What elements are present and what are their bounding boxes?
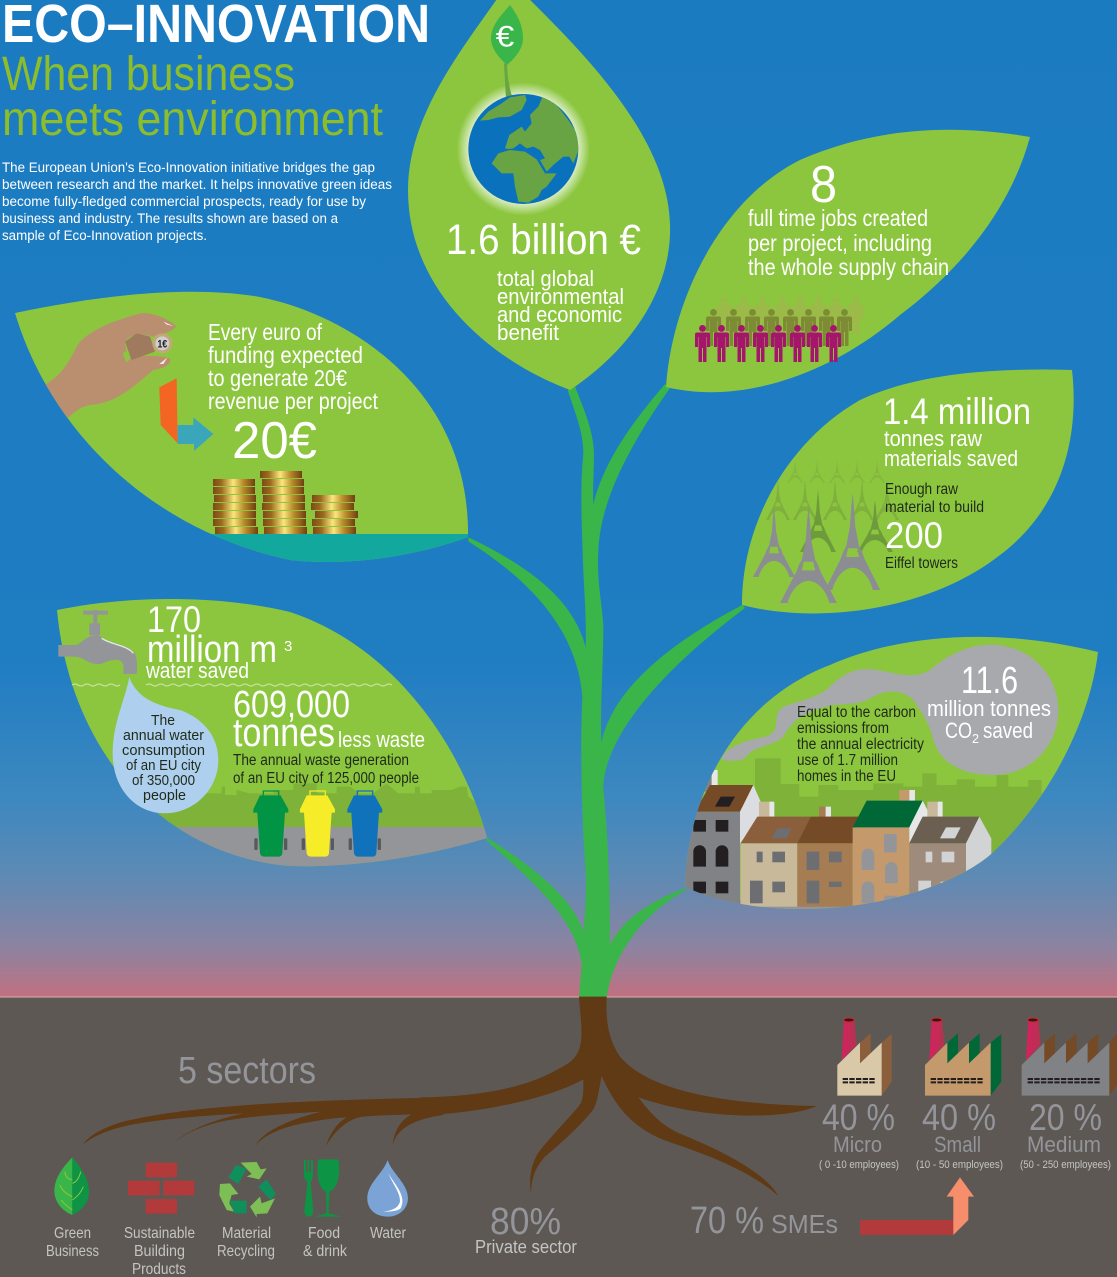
factory: medium: 20 %: [1029, 1097, 1102, 1138]
description: carbon emissions: emissions from: [797, 720, 889, 737]
panel: CO2 and houses leaf: [670, 637, 1098, 920]
wave dividers: [72, 684, 392, 686]
sector: water: [367, 1160, 408, 1242]
intro text: The European Union's Eco-Innovation initiative bridges the gap: [2, 160, 375, 175]
sector: water: Water: [370, 1225, 407, 1242]
panel: water and waste leaf: [50, 599, 500, 877]
stat: 80% private sector: 80%: [490, 1201, 561, 1243]
intro text: between research and the market. It helps innovative green ideas: [2, 177, 392, 192]
panel: top leaf, global benefit: [408, 0, 670, 390]
description: enough raw material: [885, 481, 984, 516]
factory: medium: [1020, 1018, 1117, 1171]
factory: small: [916, 1018, 1003, 1171]
description: jobs: the whole supply chain: [748, 254, 949, 280]
big number: 170 million m3: 170: [147, 599, 201, 640]
big number: 170 million m3: water saved: [145, 658, 249, 683]
big number: 11.6 million tonnes CO2: saved: [983, 718, 1033, 743]
factory: micro: Micro: [833, 1132, 882, 1157]
description: funding: Every euro of: [208, 319, 323, 345]
description: funding: [208, 319, 379, 414]
description: global benefit: environmental: [497, 284, 624, 309]
big number: 170 million m3: [145, 599, 292, 683]
intro text: business and industry. The results shown are based on a: [2, 211, 338, 226]
big number: 8: 8: [810, 156, 837, 214]
factory: micro: ( 0 -10 employees): [819, 1159, 899, 1171]
water drop callout: of an EU city: [126, 757, 201, 774]
description: carbon emissions: [797, 704, 924, 785]
water drop callout: consumption: [122, 742, 205, 759]
title block: [2, 0, 430, 146]
sector: material recycling: Recycling: [217, 1243, 275, 1260]
icon: water tap: [58, 610, 137, 674]
illustration: row of houses: [685, 770, 992, 909]
soil ground: [0, 997, 1117, 1277]
description: enough raw material: Enough raw: [885, 481, 958, 498]
big number: 609,000 tonnes: 609,000: [233, 684, 350, 726]
description: funding: to generate 20€: [208, 365, 347, 391]
description: funding: revenue per project: [208, 388, 379, 414]
factory: micro: [819, 1018, 899, 1171]
sector: food and drink: Food: [308, 1225, 340, 1242]
water drop callout: of 350,000: [132, 772, 195, 789]
description: global benefit: and economic: [497, 302, 622, 327]
panel: jobs leaf: [666, 130, 1030, 392]
description: Eiffel towers: Eiffel towers: [885, 555, 958, 572]
factory: small: (10 - 50 employees): [916, 1159, 1003, 1171]
icon: hand holding 1 euro coin: 1€: [157, 338, 168, 350]
stat: 70% SMEs: SMEs: [771, 1209, 838, 1239]
title block: meets environment: [2, 93, 383, 146]
big number: 11.6 million tonnes CO2: 2: [972, 731, 979, 746]
big number: 20 euro: 20€: [232, 412, 317, 470]
sector: green business: Business: [46, 1243, 99, 1260]
heading: 5 sectors: 5 sectors: [178, 1050, 316, 1092]
big number: 1.6 billion: 1.6 billion €: [446, 216, 641, 264]
icon: hand holding 1 euro coin: [42, 313, 176, 422]
sector: food and drink: & drink: [303, 1243, 348, 1260]
city skyline and road: [157, 784, 487, 866]
description: jobs: [748, 205, 949, 280]
icon: rows of workers: [695, 297, 863, 362]
big number: 170 million m3: 3: [284, 638, 292, 655]
description: global benefit: total global: [497, 266, 594, 291]
sector: green business: [46, 1157, 99, 1260]
intro text: sample of Eco-Innovation projects.: [2, 228, 207, 243]
sector: sustainable building products: [124, 1163, 195, 1277]
water drop callout: people: [143, 787, 186, 804]
description: global benefit: [497, 266, 624, 345]
intro text: become fully-fledged commercial prospects, ready for use by: [2, 194, 366, 209]
big number: 1.4 million: 1.4 million: [883, 391, 1031, 432]
stat: 80% private sector: Private sector: [475, 1237, 577, 1257]
factory: micro: 40 %: [822, 1097, 895, 1138]
sector: sustainable building products: Sustainable: [124, 1225, 195, 1242]
big number: 609,000 tonnes: tonnes: [233, 711, 335, 755]
arrow: funding to revenue: [159, 378, 213, 451]
stat: 80% private sector: [475, 1201, 577, 1257]
description: funding: funding expected: [208, 342, 363, 368]
arrow: SMEs to company sizes: [860, 1177, 974, 1235]
teal ground strip: [212, 534, 468, 562]
icon: Eiffel towers: [753, 460, 899, 603]
description: carbon emissions: use of 1.7 million: [797, 752, 898, 769]
sector: material recycling: Material: [222, 1225, 271, 1242]
description: jobs: full time jobs created: [748, 205, 928, 231]
city skyline: [755, 758, 1070, 903]
sector: green business: Green: [54, 1225, 91, 1242]
sector: sustainable building products: Building: [134, 1243, 185, 1260]
panel: raw materials leaf: [742, 370, 1074, 613]
big number: 11.6 million tonnes CO2: million tonnes: [927, 696, 1051, 721]
factory: small: Small: [934, 1132, 981, 1157]
sector: food and drink: [303, 1159, 348, 1260]
big number: 11.6 million tonnes CO2: 11.6: [961, 660, 1018, 702]
icon: globe with euro sprout: [457, 5, 590, 216]
big number: 11.6 million tonnes CO2: [927, 660, 1051, 746]
panel: funding leaf: [0, 292, 480, 574]
description: carbon emissions: homes in the EU: [797, 768, 896, 785]
description: waste: The annual waste generation: [233, 752, 409, 769]
plant stem: [468, 384, 745, 998]
sky background: [0, 0, 1117, 998]
big number: 11.6 million tonnes CO2: CO: [945, 718, 972, 743]
icon: recycling bins: [253, 791, 382, 857]
icon: coin stacks: [213, 471, 358, 534]
description: enough raw material: material to build: [885, 499, 984, 516]
description: carbon emissions: Equal to the carbon: [797, 704, 916, 721]
roots: [83, 997, 817, 1196]
description: waste: [233, 752, 419, 787]
description: materials saved: tonnes raw: [884, 426, 982, 451]
icon: globe with euro sprout: €: [496, 20, 514, 53]
water drop callout: [113, 677, 218, 813]
factory: small: 40 %: [922, 1097, 996, 1138]
big number: 200: 200: [885, 515, 943, 556]
big number: 609,000 tonnes: [233, 684, 425, 755]
water drop callout: The: [151, 712, 175, 729]
description: materials saved: [884, 426, 1018, 471]
big number: 609,000 tonnes: less waste: [338, 727, 425, 752]
big number: 170 million m3: million m: [147, 629, 277, 671]
sector: material recycling: [217, 1162, 276, 1260]
title block: When business: [2, 48, 295, 101]
intro text: [2, 160, 392, 243]
description: materials saved: materials saved: [884, 446, 1018, 471]
stat: 70% SMEs: [690, 1200, 838, 1242]
smoke cloud: [722, 645, 1058, 775]
description: global benefit: benefit: [497, 320, 559, 345]
description: waste: of an EU city of 125,000 people: [233, 770, 419, 787]
water drop callout: annual water: [123, 727, 204, 744]
description: carbon emissions: the annual electricity: [797, 736, 924, 753]
stat: 70% SMEs: 70 %: [690, 1200, 764, 1242]
description: jobs: per project, including: [748, 230, 932, 256]
factory: medium: Medium: [1027, 1132, 1101, 1157]
